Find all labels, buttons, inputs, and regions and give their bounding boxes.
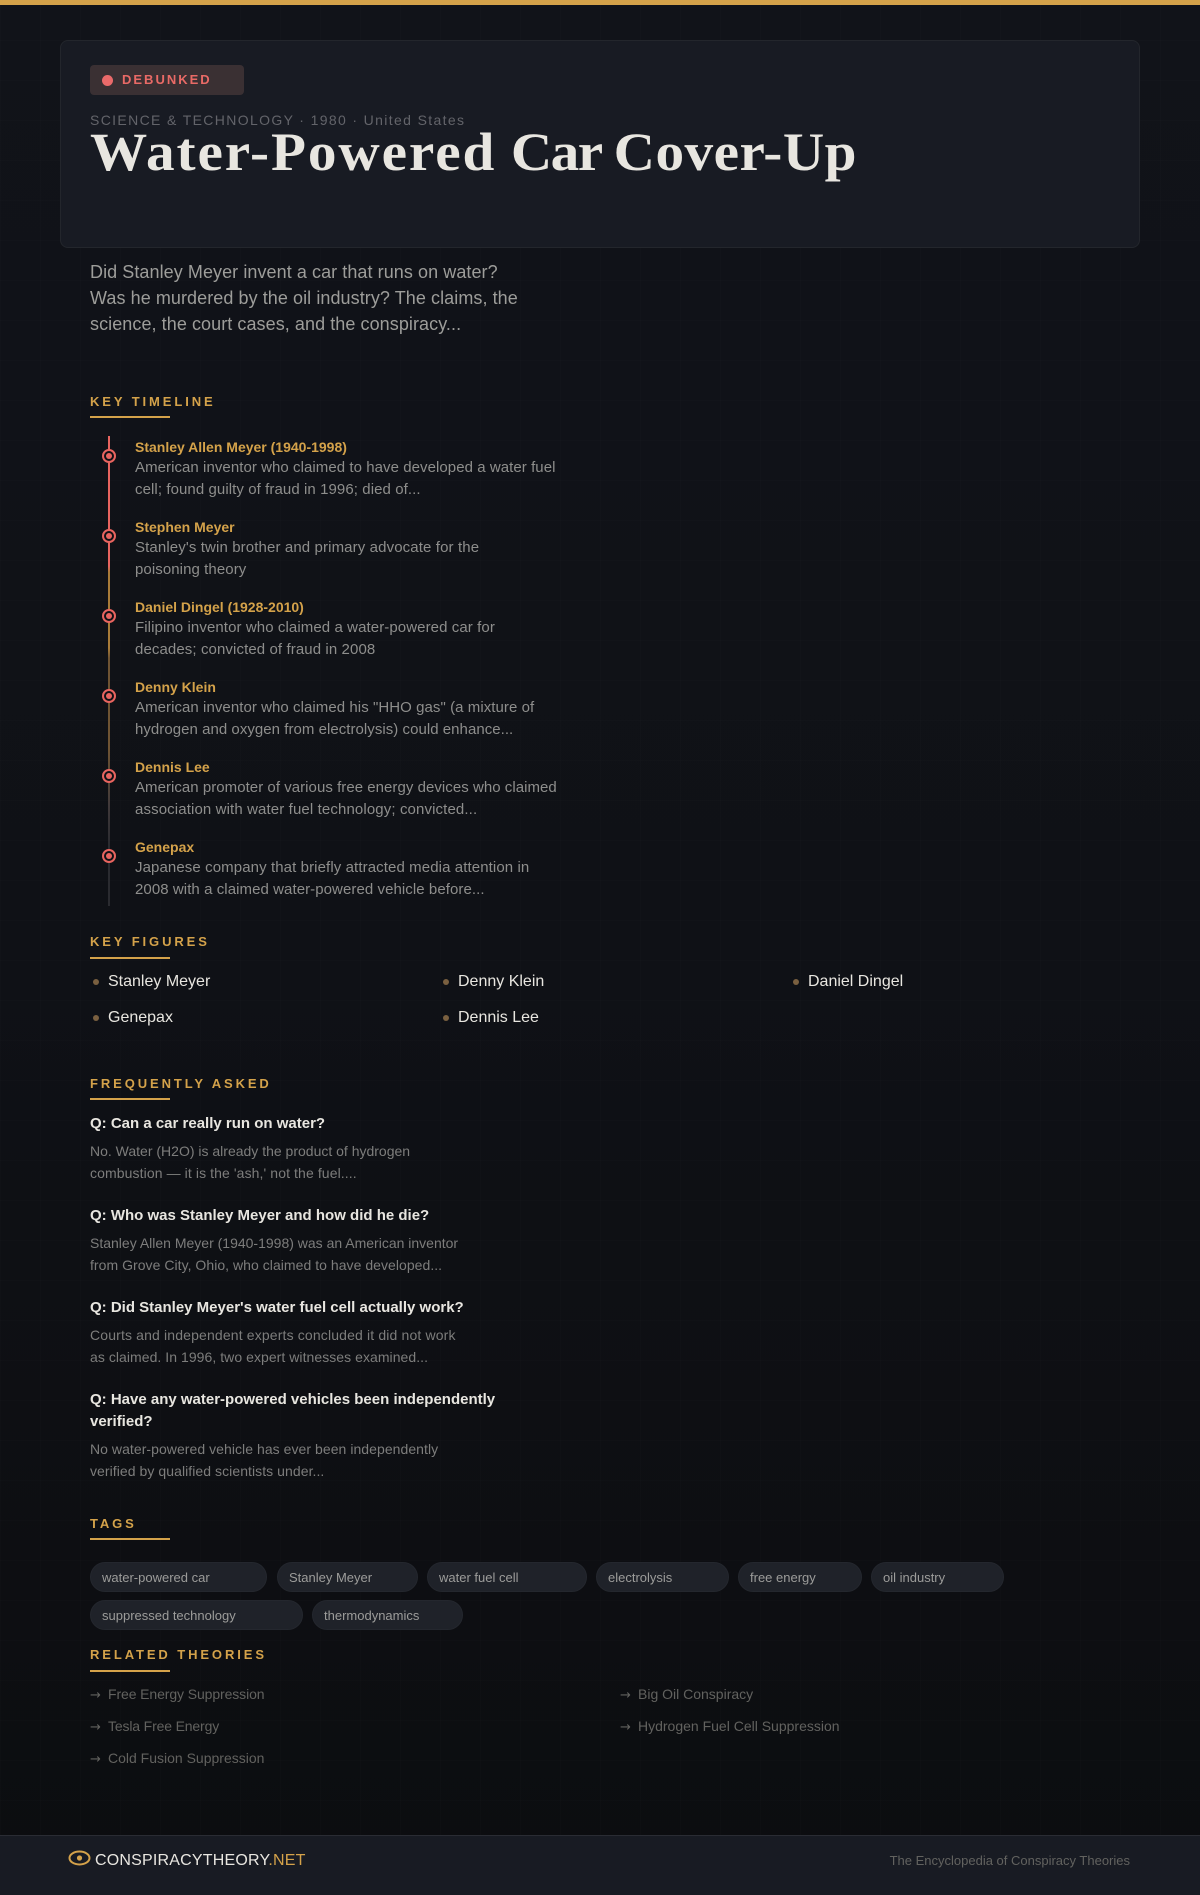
answer: Courts and independent experts concluded it did not work xyxy=(90,1327,456,1343)
badge label: DEBUNKED xyxy=(122,72,212,87)
figure: Denny Klein: Denny Klein xyxy=(458,973,544,990)
answer: No water-powered vehicle has ever been independently xyxy=(90,1441,438,1457)
status badge: debunked xyxy=(90,65,244,95)
faq item 1 xyxy=(90,1115,410,1181)
timeline xyxy=(108,436,110,906)
faq item 3 xyxy=(90,1299,464,1365)
figure: Dennis Lee: Dennis Lee xyxy=(458,1009,539,1026)
answer: No. Water (H2O) is already the product of hydrogen xyxy=(90,1143,410,1159)
figure: Daniel Dingel: Daniel Dingel xyxy=(808,973,903,990)
heading: related theories: RELATED THEORIES xyxy=(90,1647,267,1662)
tag list xyxy=(90,1562,1004,1630)
faq item 2: from Grove City, Ohio, who claimed to have developed... xyxy=(90,1257,442,1273)
related theories list xyxy=(90,1686,840,1767)
intro text: Was he murdered by the oil industry? The claims, the xyxy=(90,288,518,308)
category meta line: SCIENCE & TECHNOLOGY · 1980 · United States xyxy=(90,112,465,128)
timeline item: Daniel Dingel xyxy=(102,599,495,658)
top accent bar xyxy=(0,0,1200,5)
timeline spine xyxy=(108,436,110,906)
description: Filipino inventor who claimed a water-powered car for xyxy=(135,619,495,636)
timeline item: Stephen Meyer xyxy=(102,519,479,578)
intro text: science, the court cases, and the conspiracy... xyxy=(90,314,461,334)
marker xyxy=(102,849,116,863)
question: Q: Have any water-powered vehicles been independently xyxy=(90,1391,495,1408)
name: Denny Klein xyxy=(135,679,216,695)
question: Q: Did Stanley Meyer's water fuel cell actually work? xyxy=(90,1299,464,1316)
tag: electrolysis xyxy=(608,1570,672,1585)
tag: Stanley Meyer xyxy=(289,1570,372,1585)
answer: Stanley Allen Meyer (1940-1998) was an American inventor xyxy=(90,1235,458,1251)
description: Japanese company that briefly attracted media attention in xyxy=(135,859,529,876)
tag: water-powered car xyxy=(102,1570,210,1585)
description: American inventor who claimed his "HHO gas" (a mixture of xyxy=(135,699,534,716)
marker xyxy=(102,689,116,703)
footer xyxy=(0,1835,1200,1895)
title: Water-Powered xyxy=(90,122,496,182)
name: Daniel Dingel (1928-2010) xyxy=(135,599,304,615)
tag xyxy=(871,1562,1004,1592)
heading: tags: TAGS xyxy=(90,1516,137,1531)
tag: oil industry xyxy=(883,1570,945,1585)
related link: → xyxy=(90,1720,101,1735)
marker xyxy=(102,769,116,783)
tag xyxy=(312,1600,463,1630)
timeline item: Stanley Allen Meyer: cell; found guilty of fraud in 1996; died of... xyxy=(135,481,421,498)
description: Stanley's twin brother and primary advocate for the xyxy=(135,539,479,556)
related link: Big Oil Conspiracy xyxy=(638,1686,753,1702)
timeline item: Stephen Meyer: poisoning theory xyxy=(135,561,246,578)
timeline item: Daniel Dingel: decades; convicted of fraud in 2008 xyxy=(135,641,375,658)
badge dot xyxy=(102,75,113,86)
related link: Free Energy Suppression xyxy=(108,1686,264,1702)
faq item 4: verified by qualified scientists under... xyxy=(90,1463,324,1479)
tag xyxy=(90,1600,303,1630)
tag xyxy=(427,1562,587,1592)
faq item 1: combustion — it is the 'ash,' not the fuel.... xyxy=(90,1165,357,1181)
heading: frequently asked: FREQUENTLY ASKED xyxy=(90,1076,272,1091)
related link: Cold Fusion Suppression xyxy=(108,1750,264,1766)
figure: Genepax: Genepax xyxy=(108,1009,173,1026)
question: Q: Who was Stanley Meyer and how did he die? xyxy=(90,1207,429,1224)
question: Q: Can a car really run on water? xyxy=(90,1115,325,1132)
marker xyxy=(102,609,116,623)
related link: → xyxy=(90,1752,101,1767)
title xyxy=(90,122,857,182)
logo wordmark: CONSPIRACYTHEORY.NET xyxy=(95,1852,306,1869)
timeline item: Dennis Lee: association with water fuel technology; convicted... xyxy=(135,801,477,818)
timeline item: Dennis Lee xyxy=(102,759,557,818)
key figures list xyxy=(93,973,903,1026)
faq item 4: verified? xyxy=(90,1413,153,1430)
title: Car xyxy=(511,122,601,182)
timeline item: Genepax xyxy=(102,839,529,898)
name: Genepax xyxy=(135,839,194,855)
timeline item: Stanley Allen Meyer xyxy=(102,439,556,498)
footer tagline: The Encyclopedia of Conspiracy Theories xyxy=(890,1853,1130,1868)
heading: key timeline: KEY TIMELINE xyxy=(90,394,216,409)
related link: Hydrogen Fuel Cell Suppression xyxy=(638,1718,840,1734)
marker xyxy=(102,449,116,463)
tag: free energy xyxy=(750,1570,816,1585)
name: Stephen Meyer xyxy=(135,519,235,535)
related link: → xyxy=(620,1720,631,1735)
intro text: Did Stanley Meyer invent a car that runs on water? xyxy=(90,262,498,282)
tag: suppressed technology xyxy=(102,1608,236,1623)
tag xyxy=(277,1562,418,1592)
title: Cover-Up xyxy=(614,122,857,182)
tag xyxy=(90,1562,267,1592)
related link: → xyxy=(90,1688,101,1703)
name: Stanley Allen Meyer (1940-1998) xyxy=(135,439,347,455)
icon: eye logo xyxy=(68,1850,90,1866)
related link: Tesla Free Energy xyxy=(108,1718,219,1734)
faq item 3: as claimed. In 1996, two expert witnesses examined... xyxy=(90,1349,428,1365)
timeline item: Denny Klein: hydrogen and oxygen from electrolysis) could enhance... xyxy=(135,721,513,738)
tag xyxy=(738,1562,862,1592)
name: Dennis Lee xyxy=(135,759,210,775)
tag xyxy=(596,1562,729,1592)
description: American promoter of various free energy devices who claimed xyxy=(135,779,557,796)
marker xyxy=(102,529,116,543)
faq item 4 xyxy=(90,1391,495,1479)
heading: key figures: KEY FIGURES xyxy=(90,934,210,949)
figure: Stanley Meyer: Stanley Meyer xyxy=(108,973,210,990)
tag: water fuel cell xyxy=(439,1570,518,1585)
timeline item: Genepax: 2008 with a claimed water-powered vehicle before... xyxy=(135,881,485,898)
panel: header xyxy=(60,40,1140,248)
related link: → xyxy=(620,1688,631,1703)
description: American inventor who claimed to have developed a water fuel xyxy=(135,459,556,476)
tag: thermodynamics xyxy=(324,1608,419,1623)
faq item 2 xyxy=(90,1207,458,1273)
timeline item: Denny Klein xyxy=(102,679,534,738)
intro text xyxy=(90,262,518,334)
